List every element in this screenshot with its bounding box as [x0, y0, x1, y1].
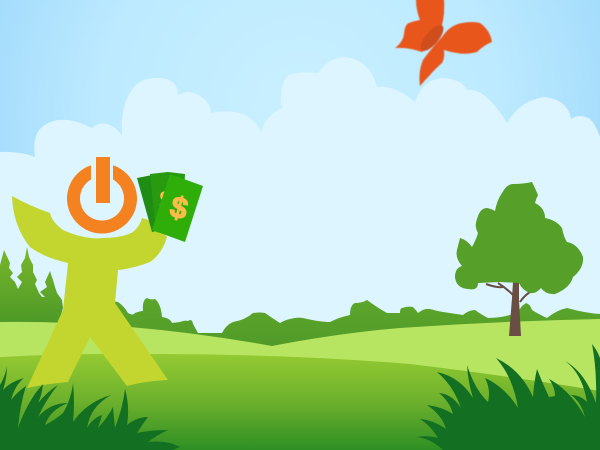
stick figure [12, 196, 168, 388]
grass, left [0, 366, 180, 450]
distant trees, left [0, 247, 80, 325]
partly hidden dollar sign: $ [159, 185, 175, 216]
front hill [0, 354, 600, 450]
icon: banknotes [137, 172, 203, 242]
distant bushes, right [222, 300, 600, 350]
butterfly body [417, 22, 447, 54]
grass, right [416, 344, 600, 450]
back hills [0, 319, 600, 450]
dollar sign: $ [167, 190, 192, 227]
front note [152, 174, 203, 242]
tree [455, 182, 583, 336]
butterfly wings [395, 0, 492, 86]
clouds [0, 57, 600, 340]
butterfly [395, 0, 492, 86]
icon: power symbol head [67, 157, 137, 234]
middle note [150, 172, 185, 236]
back note [137, 172, 176, 232]
distant bushes, left [105, 298, 222, 350]
tree trunk and branches [486, 282, 530, 336]
tree foliage [455, 182, 583, 294]
